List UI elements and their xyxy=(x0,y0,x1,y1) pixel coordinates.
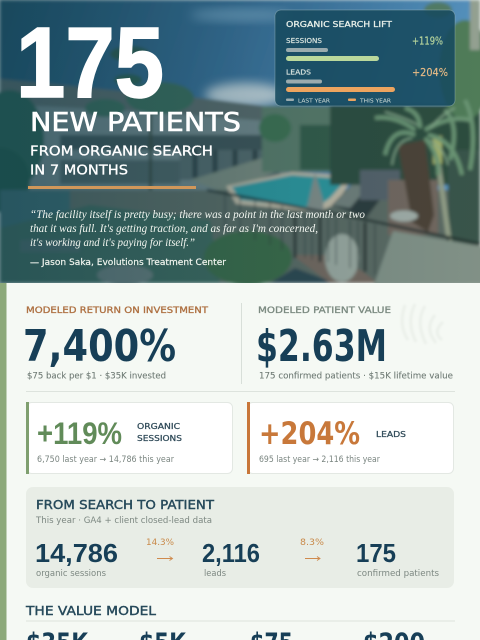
panel: from search to patient xyxy=(26,487,454,588)
headline number: 175 xyxy=(16,7,164,119)
accent rule xyxy=(28,186,196,189)
building roof xyxy=(0,79,280,122)
testimonial quote: it's working and it's paying for itself.” xyxy=(30,237,195,249)
umbrella xyxy=(306,173,324,214)
leads row: +204% xyxy=(412,67,448,79)
legend: LAST YEAR xyxy=(298,98,330,104)
far trees xyxy=(262,106,332,172)
panel title: ORGANIC SEARCH LIFT xyxy=(286,20,393,29)
lounge chairs xyxy=(194,158,272,190)
funnel: patients: confirmed patients xyxy=(357,569,439,579)
testimonial quote: that it was full. It's getting traction, and as far as I'm concerned, xyxy=(30,223,318,235)
subheading: FROM ORGANIC SEARCH xyxy=(30,144,213,160)
funnel: sessions: 14,786 xyxy=(35,538,118,568)
card: organic sessions: ORGANIC xyxy=(137,422,181,431)
left foliage xyxy=(0,90,44,190)
concrete ledge xyxy=(374,231,480,285)
stat: return on investment: MODELED RETURN ON INVESTMENT xyxy=(26,306,209,316)
leads row xyxy=(286,67,448,92)
funnel: sessions: organic sessions xyxy=(36,569,106,579)
funnel: patients: 175 xyxy=(356,538,396,568)
heading: the value model: THE VALUE MODEL xyxy=(25,604,156,618)
panel: from search to patient: This year · GA4 + client closed-lead data xyxy=(35,516,212,526)
shrub xyxy=(204,231,292,285)
legend xyxy=(286,98,391,104)
stat: return on investment: 7,400% xyxy=(23,321,176,372)
patio ground xyxy=(69,188,480,283)
vertical divider xyxy=(241,303,242,384)
card: leads: 695 last year → 2,116 this year xyxy=(259,455,380,465)
stat: patient value: 175 confirmed patients · $15K lifetime value xyxy=(259,372,453,382)
funnel arrow 2 xyxy=(300,538,324,560)
patio table xyxy=(390,210,418,222)
funnel: leads xyxy=(202,538,260,579)
testimonial quote: “The facility itself is pretty busy; there was a point in the last month or two xyxy=(30,209,365,221)
card: organic sessions: SESSIONS xyxy=(137,434,182,443)
subheading xyxy=(30,144,213,178)
hero photo xyxy=(0,0,480,285)
funnel arrow 2: 8.3% xyxy=(300,538,324,548)
stat: patient value: $2.63M xyxy=(256,321,387,372)
funnel: patients xyxy=(356,538,439,579)
hanging chair xyxy=(325,234,359,282)
stat: patient value: MODELED PATIENT VALUE xyxy=(258,306,391,316)
right palms xyxy=(330,105,480,185)
left accent strip xyxy=(0,283,6,640)
stat: return on investment xyxy=(23,306,209,382)
value model figures xyxy=(26,628,425,640)
lower steps xyxy=(332,196,380,219)
stat: return on investment: $75 back per $1 · $35K invested xyxy=(27,372,166,382)
stat: patient value xyxy=(256,306,453,382)
testimonial quote xyxy=(30,209,365,249)
sessions row: +119% xyxy=(412,36,443,48)
card: organic sessions: +119% xyxy=(37,415,122,451)
funnel: leads: leads xyxy=(204,569,226,579)
sessions row: SESSIONS xyxy=(286,37,323,45)
quote attribution: — Jason Saka, Evolutions Treatment Center xyxy=(30,258,226,268)
hero overlay xyxy=(0,0,480,283)
legend: THIS YEAR xyxy=(359,98,391,104)
funnel arrow 1: 14.3% xyxy=(146,538,174,548)
headline: new patients: NEW PATIENTS xyxy=(30,108,241,138)
leads row: LEADS xyxy=(286,68,312,76)
building walls xyxy=(27,104,286,192)
card: leads: +204% xyxy=(259,416,360,452)
card: leads: LEADS xyxy=(376,430,406,439)
fence xyxy=(207,190,480,244)
card: organic sessions: 6,750 last year → 14,786 this year xyxy=(37,455,174,465)
center palm xyxy=(126,82,194,114)
pool deck and pool xyxy=(226,172,354,212)
sessions row xyxy=(286,36,443,61)
subheading: IN 7 MONTHS xyxy=(30,162,128,178)
card: organic sessions xyxy=(26,402,232,474)
panel: from search to patient: FROM SEARCH TO PATIENT xyxy=(36,498,215,512)
watermark icon xyxy=(402,304,443,344)
funnel: leads: 2,116 xyxy=(202,538,260,568)
panel: organic search lift xyxy=(275,10,455,106)
card: leads xyxy=(247,402,454,474)
funnel arrow 1 xyxy=(146,538,174,560)
